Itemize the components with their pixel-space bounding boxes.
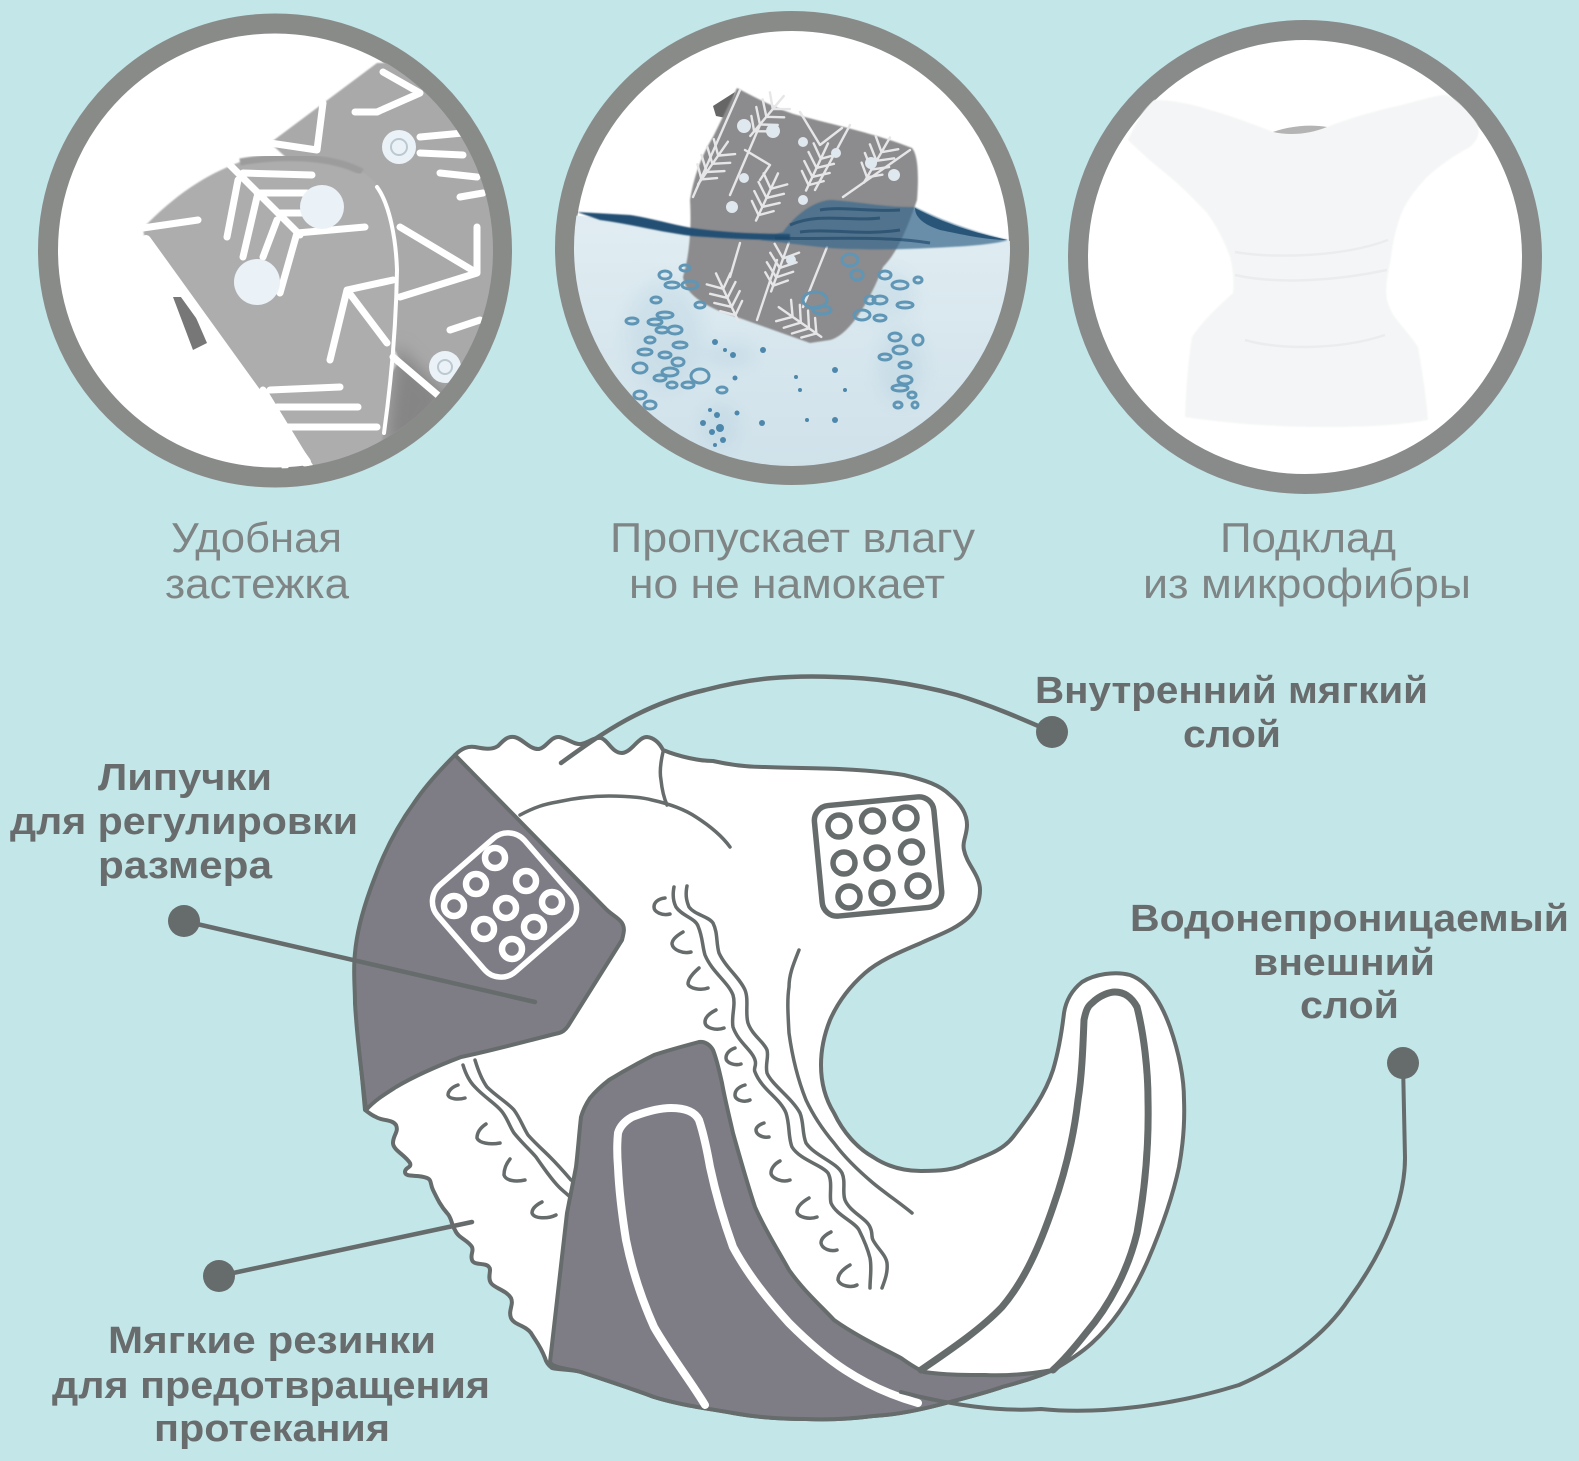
grey bottom panel: [550, 1042, 1053, 1419]
caption: lining: [1143, 514, 1471, 607]
photo circle: snap closure: [48, 24, 502, 480]
label: soft elastics: [52, 1320, 490, 1450]
caption: closure: [165, 514, 350, 607]
label: inner soft layer: слой: [1183, 714, 1281, 756]
elastic: lower double line: [463, 1060, 571, 1197]
label: velcro straps: для регулировки: [10, 801, 358, 843]
inner leg seam: [788, 950, 912, 1213]
elastic: double wavy line: [673, 887, 871, 1288]
right prong thick seam: [921, 992, 1148, 1370]
caption: moisture: но не намокает: [629, 560, 945, 607]
velcro panel on tab: [423, 824, 586, 986]
label: inner soft layer: Внутренний мягкий: [1035, 670, 1428, 712]
left grey tab: [354, 755, 624, 1110]
caption: closure: Удобная: [171, 514, 342, 561]
label: velcro straps: размера: [98, 845, 273, 887]
label: waterproof outer layer: [1130, 898, 1569, 1027]
caption: moisture: Пропускает влагу: [610, 514, 975, 561]
photo circle: microfibre lining: [1078, 30, 1532, 484]
leader: inner soft layer: [561, 676, 1068, 763]
caption: lining: Подклад: [1220, 514, 1396, 561]
label: soft elastics: протекания: [154, 1408, 390, 1450]
submerged diaper: [683, 88, 918, 343]
diaper white body: [355, 737, 1184, 1419]
label: waterproof outer layer: Водонепроницаемый: [1130, 898, 1569, 940]
snaps: [726, 119, 900, 265]
elastic stitches, lower: [448, 1085, 556, 1218]
caption: moisture: [610, 514, 975, 607]
back fabric: [273, 62, 493, 447]
snaps: [300, 185, 344, 229]
flap: [143, 158, 398, 470]
velcro panel on wing: [813, 796, 943, 917]
leader: soft elastics: [203, 1222, 472, 1292]
label: soft elastics: для предотвращения: [52, 1365, 490, 1407]
caption: closure: застежка: [165, 560, 350, 607]
white stripe on grey panel: [617, 1108, 918, 1405]
photo circle: water: [565, 21, 1019, 475]
bubbles: [626, 254, 923, 409]
leader: velcro straps: [168, 905, 535, 1002]
diaper diagram: [354, 737, 1184, 1419]
label: velcro straps: [10, 757, 358, 887]
label: waterproof outer layer: внешний: [1253, 942, 1435, 984]
elastic stitches, upper: [654, 898, 857, 1286]
velcro tab: [713, 92, 735, 118]
label: inner soft layer: [1035, 670, 1428, 756]
caption: lining: из микрофибры: [1143, 560, 1471, 607]
label: velcro straps: Липучки: [98, 757, 272, 799]
waistband seams: [520, 752, 730, 847]
bubble haze: [627, 270, 924, 447]
diaper arrows: [687, 87, 910, 348]
velcro tab: [173, 297, 207, 350]
leader: waterproof outer layer: [901, 1047, 1419, 1411]
label: soft elastics: Мягкие резинки: [108, 1320, 436, 1362]
label: waterproof outer layer: слой: [1300, 985, 1399, 1027]
wave: [760, 200, 1008, 249]
water body: [570, 210, 1015, 470]
